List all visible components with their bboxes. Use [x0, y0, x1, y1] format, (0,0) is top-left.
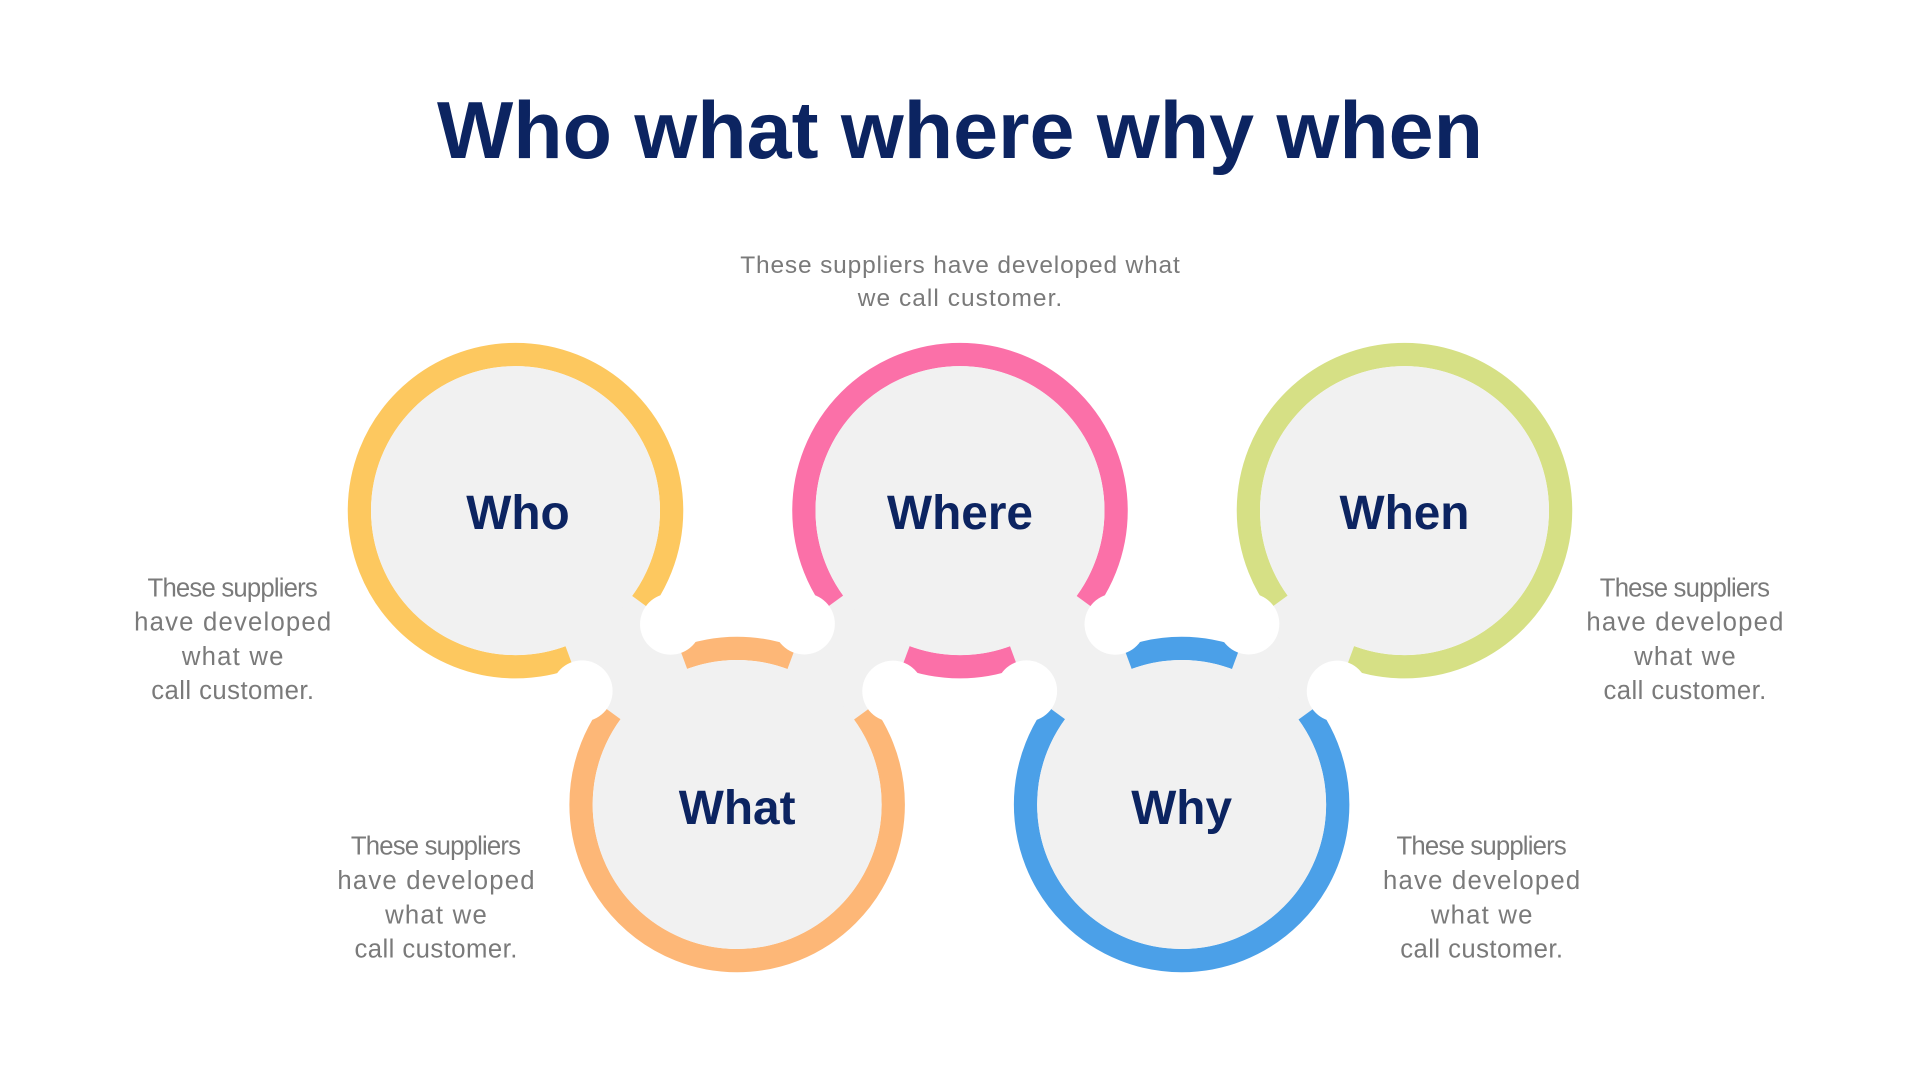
text block: what description: call customer. [354, 936, 517, 964]
diagram: linked circles [359, 354, 1561, 961]
text block: who description [134, 574, 331, 705]
labels: Why [1131, 782, 1232, 835]
necks [516, 511, 1404, 804]
text block: what description: have developed [337, 867, 534, 895]
text block: when description [1586, 574, 1783, 705]
text block: when description: what we [1633, 643, 1736, 671]
text block: top description: These suppliers have developed what [740, 252, 1180, 279]
text block: why description [1383, 833, 1580, 964]
title: Who what where why when [437, 86, 1483, 176]
text block: who description: have developed [134, 609, 331, 637]
labels: Where [887, 487, 1033, 540]
text block: what description [337, 833, 534, 964]
text block: why description: have developed [1383, 867, 1580, 895]
text block: who description: what we [181, 643, 283, 671]
text block: what description: These suppliers [351, 833, 521, 861]
text block: top description: we call customer. [857, 285, 1062, 312]
text block: who description: call customer. [151, 677, 314, 705]
text block: why description: call customer. [1400, 936, 1563, 964]
ring: who [359, 354, 672, 667]
ring: why [1026, 648, 1338, 961]
text block: why description: These suppliers [1397, 833, 1567, 861]
fillets [551, 593, 1368, 722]
text block: when description: These suppliers [1600, 574, 1770, 602]
ring: what [581, 648, 893, 961]
ring: when [1248, 354, 1561, 667]
text block: when description: call customer. [1603, 677, 1766, 705]
labels: When [1340, 487, 1469, 540]
text block: what description: what we [384, 901, 487, 929]
labels [466, 487, 1469, 835]
fills [371, 366, 1549, 949]
labels: What [679, 782, 796, 835]
ring: where [804, 354, 1116, 667]
labels: Who [466, 487, 570, 540]
text block: who description: These suppliers [148, 574, 318, 602]
text block: top description [740, 252, 1180, 312]
text block: why description: what we [1430, 901, 1532, 929]
text block: when description: have developed [1586, 609, 1783, 637]
